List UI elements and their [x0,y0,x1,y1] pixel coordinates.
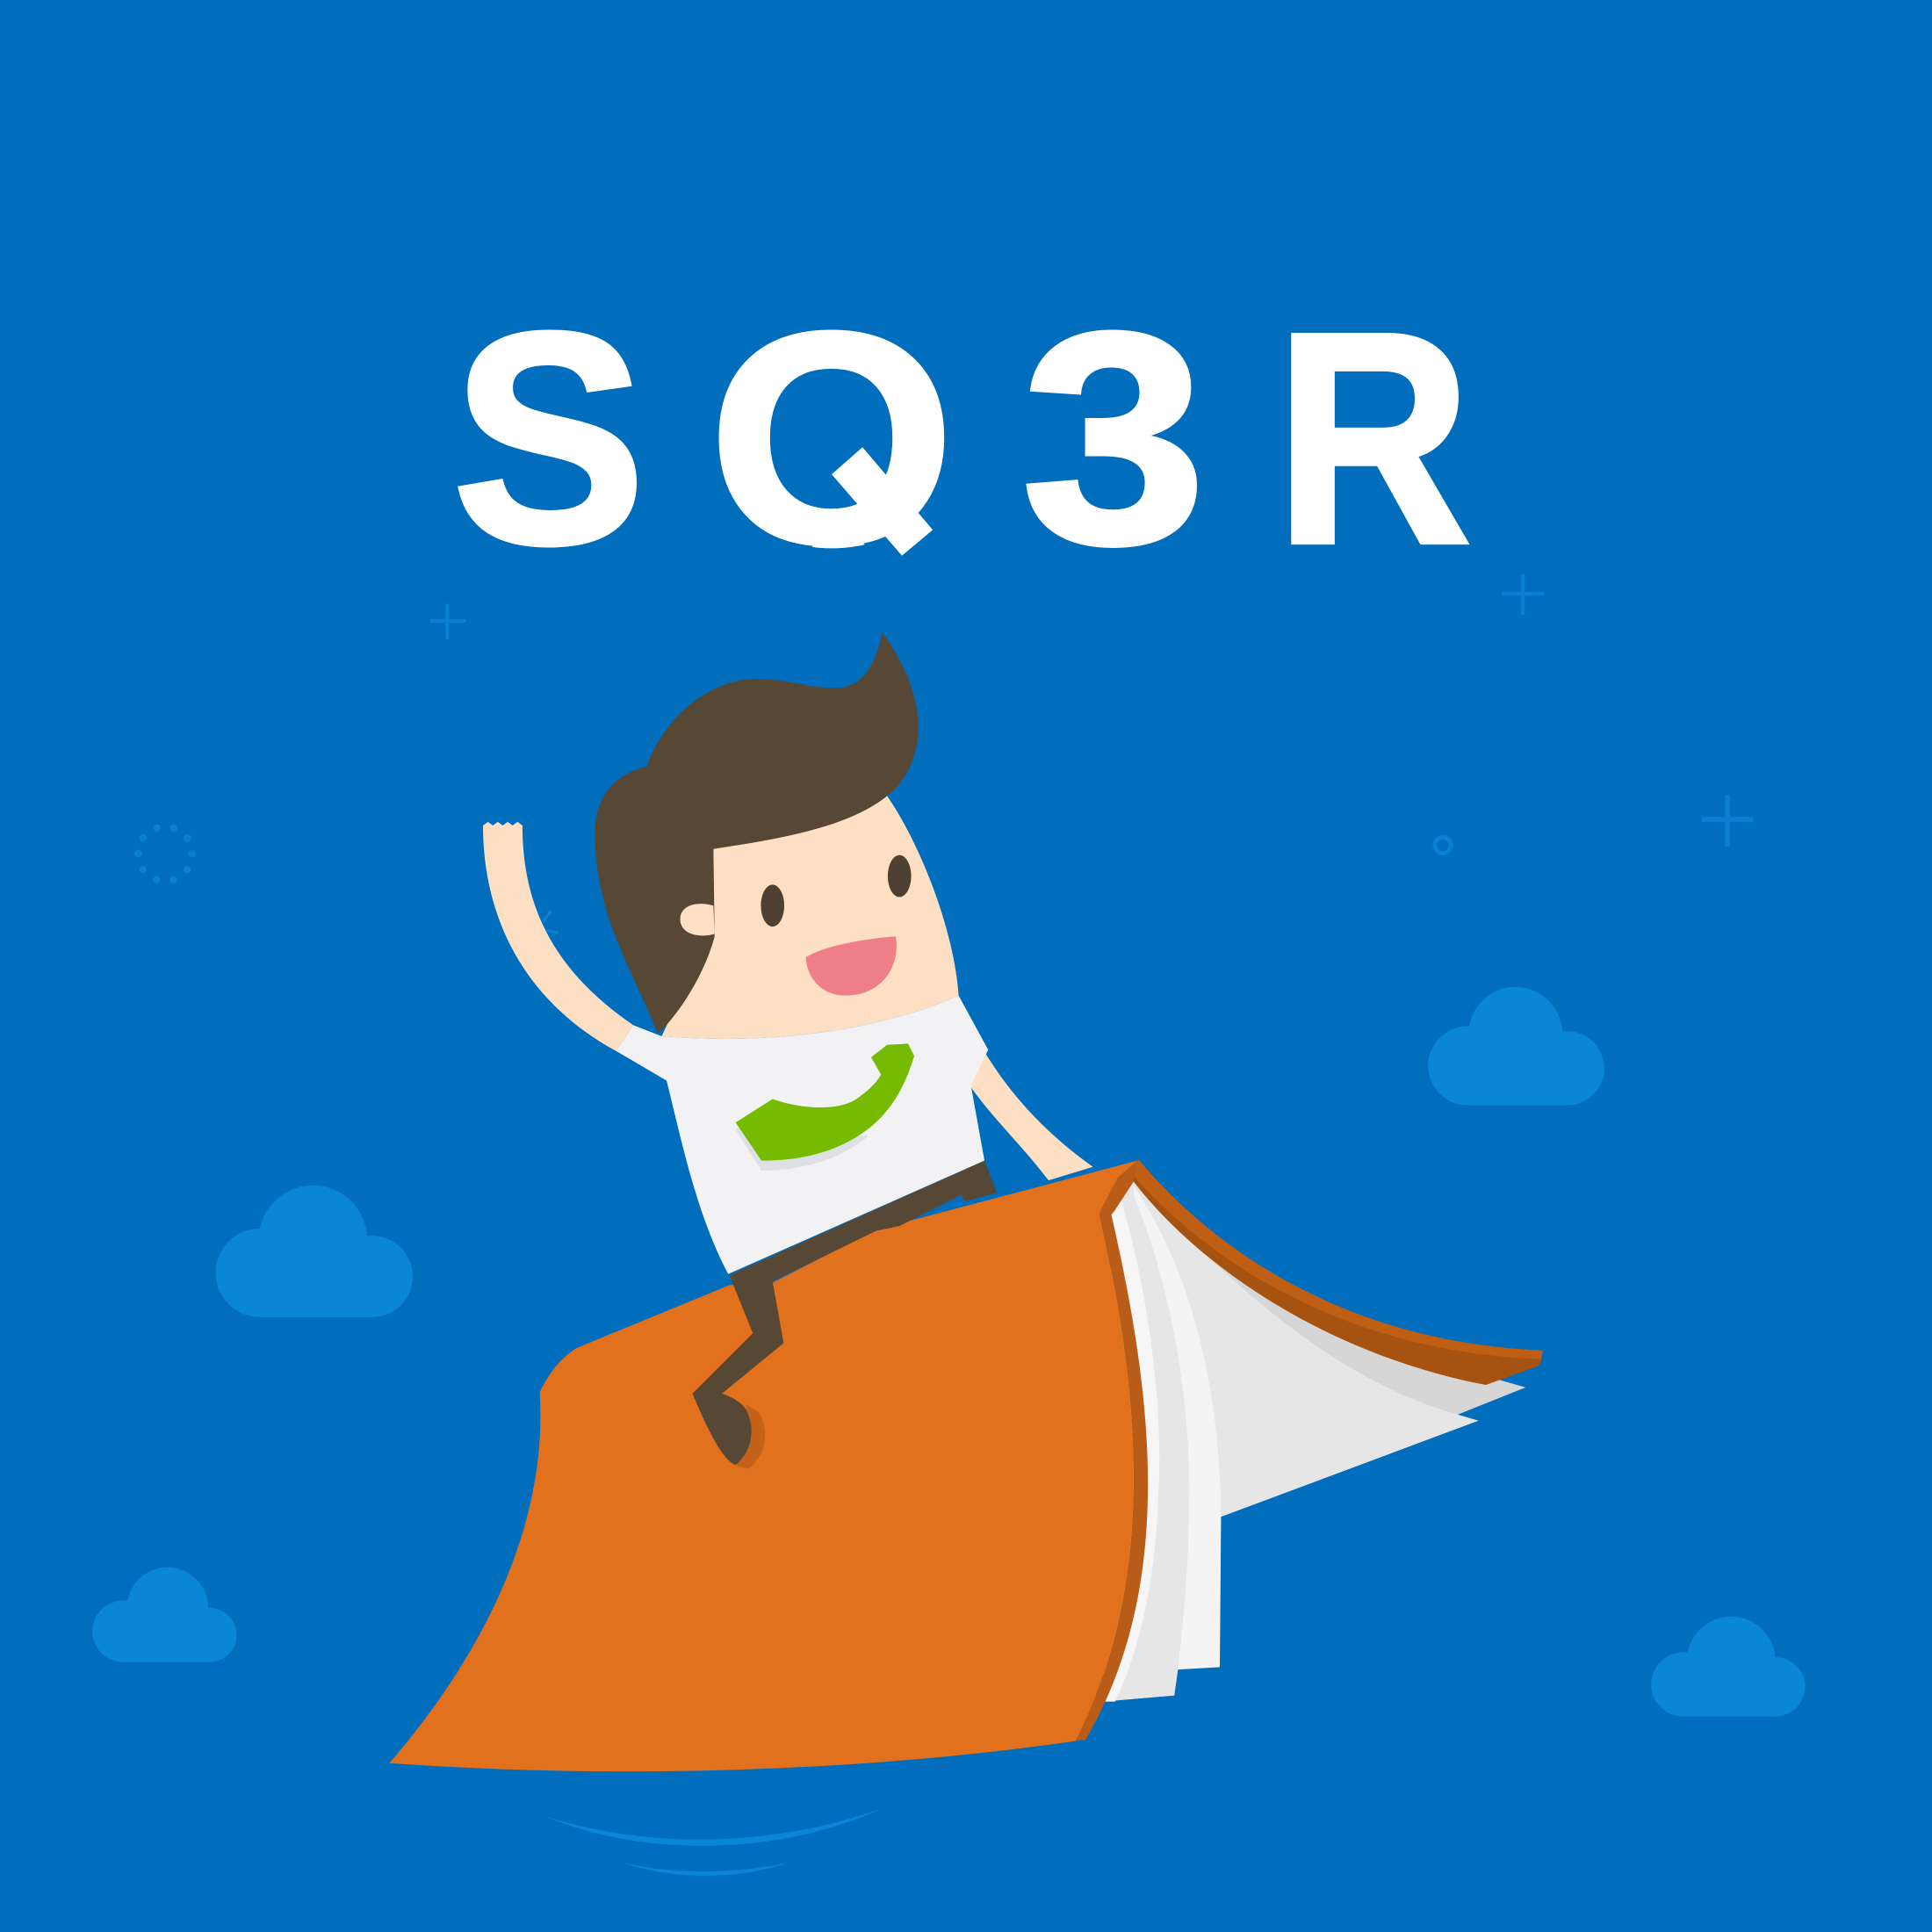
character head [595,632,959,1039]
character trousers and leg [693,1161,997,1468]
cloud: middle left [216,1186,413,1317]
shirt emblem shadow [736,1128,869,1171]
cloud: lower right [1651,1617,1805,1716]
shirt emblem [736,1043,914,1161]
cloud: upper right [1428,987,1604,1106]
water ripples [544,1809,881,1876]
book pages [1103,1177,1525,1702]
book front cover [389,1159,1148,1771]
right eye [888,855,912,897]
character's back arm [970,1049,1093,1180]
cloud: lower left [92,1568,236,1662]
title [458,330,1470,556]
title: R [1275,270,1471,606]
character torso: white t-shirt [616,996,988,1274]
title: Q [709,270,955,606]
ear [680,904,715,935]
hair [595,632,919,1034]
cover edge [1076,1159,1148,1741]
character waving arm [483,822,633,1051]
shoe shadow [737,1404,765,1468]
book back cover spine [1113,1159,1543,1385]
infographic canvas [92,330,1806,1876]
title: S [452,270,645,606]
decorative sparkles [138,574,1754,933]
title: 3 [1021,270,1207,606]
mouth [806,936,897,996]
left eye [761,884,784,926]
